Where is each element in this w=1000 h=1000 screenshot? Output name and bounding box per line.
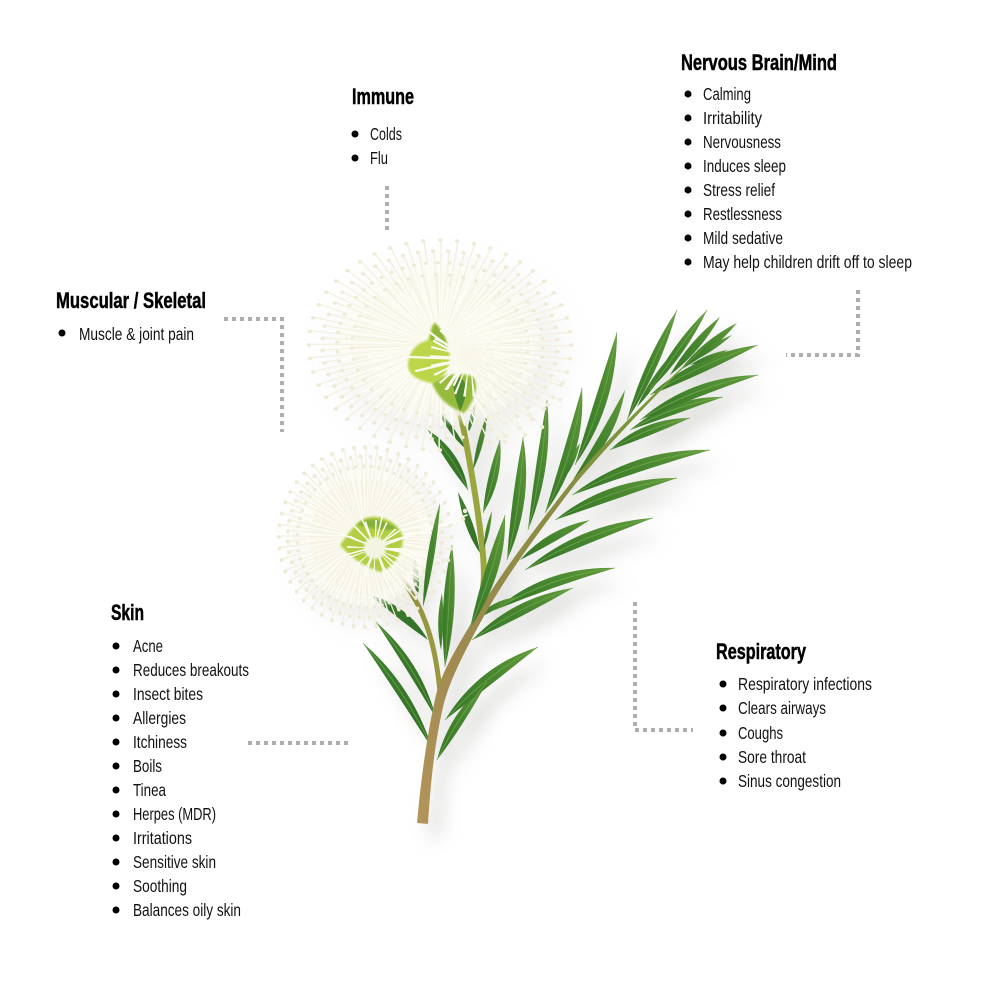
list: skin: Acne: [133, 636, 163, 656]
list: respiratory: Sore throat: [738, 747, 806, 767]
list: immune: Colds: [370, 124, 402, 144]
leaves over the stems: [470, 511, 505, 628]
flower: lower left: [279, 447, 467, 627]
list: nervous: Mild sedative: [703, 228, 783, 248]
list: nervous: Stress relief: [703, 180, 775, 200]
list: respiratory: Respiratory infections: [738, 674, 872, 694]
list: nervous: Irritability: [703, 108, 762, 128]
fluffy body: [289, 463, 441, 611]
dark green upper centre: [357, 519, 397, 530]
upper flower stem: [460, 412, 484, 618]
list: nervous: Calming: [703, 84, 751, 104]
panel: skin: [111, 600, 249, 920]
green centre: [340, 517, 403, 572]
green centre: [408, 323, 450, 383]
calyx: [432, 374, 476, 413]
list: skin: Sensitive skin: [133, 852, 216, 872]
list: nervous: Nervousness: [703, 132, 781, 152]
right strand tips: [441, 509, 467, 563]
heading: nervous brain/mind: Nervous Brain/Mind: [681, 50, 837, 75]
list: skin: Allergies: [133, 708, 186, 728]
list: skin: Tinea: [133, 780, 166, 800]
panel: muscular / skeletal: [56, 288, 206, 344]
list: respiratory: Coughs: [738, 723, 783, 743]
list: skin: Reduces breakouts: [133, 660, 249, 680]
white centre stamens: [341, 509, 467, 579]
list: skin: Itchiness: [133, 732, 187, 752]
list: skin: Balances oily skin: [133, 900, 241, 920]
stamens with tips: [279, 447, 451, 627]
upper stem leaves: [428, 403, 501, 553]
connector: respiratory: [635, 602, 693, 730]
list: skin: Boils: [133, 756, 162, 776]
connector: immune: [385, 186, 389, 231]
plant illustration: tea tree branch with two flowers: [279, 240, 758, 824]
heading: muscular / skeletal: Muscular / Skeletal: [56, 288, 206, 313]
connector: muscular: [224, 319, 282, 432]
panel: nervous brain/mind: [681, 50, 912, 272]
upper green sepal: [430, 323, 447, 347]
list: skin: Insect bites: [133, 684, 203, 704]
list: skin: Irritations: [133, 828, 192, 848]
list: respiratory: Sinus congestion: [738, 771, 841, 791]
connector: skin: [248, 741, 349, 745]
list: skin: Herpes (MDR): [133, 804, 216, 824]
list: skin: [112, 636, 249, 920]
fluffy body: [328, 255, 552, 427]
lower and left leaves: [363, 545, 538, 760]
flower: upper: [309, 240, 571, 450]
list: respiratory: Clears airways: [738, 698, 826, 718]
list: respiratory: [720, 674, 872, 791]
main stem: [417, 340, 712, 824]
list: nervous: Induces sleep: [703, 156, 786, 176]
list: muscular: Muscle & joint pain: [79, 324, 194, 344]
list: immune: Flu: [370, 148, 388, 168]
white centre stamens and long lower strands: [408, 319, 565, 444]
leaf midribs: [363, 310, 758, 760]
leaf over lower flower edge: [423, 503, 440, 607]
list: immune: [352, 124, 402, 168]
upward leaves: [507, 310, 737, 560]
panel: immune: [352, 84, 414, 168]
branch with shadow: [363, 310, 758, 824]
list: muscular: [58, 324, 194, 344]
list: nervous: Restlessness: [703, 204, 782, 224]
stamens with tips: [309, 240, 571, 450]
list: nervous: May help children drift off to sleep: [703, 252, 912, 272]
panel: respiratory: [716, 639, 872, 791]
dark sepal: [453, 377, 466, 411]
right side leaves: [472, 345, 758, 640]
heading: skin: Skin: [111, 600, 144, 625]
heading: respiratory: Respiratory: [716, 639, 807, 664]
list: skin: Soothing: [133, 876, 187, 896]
left flower stem: [392, 568, 440, 692]
strand tips: [496, 381, 565, 444]
connector: nervous: [786, 290, 858, 355]
list: nervous: [684, 84, 912, 272]
heading: immune: Immune: [352, 84, 414, 109]
